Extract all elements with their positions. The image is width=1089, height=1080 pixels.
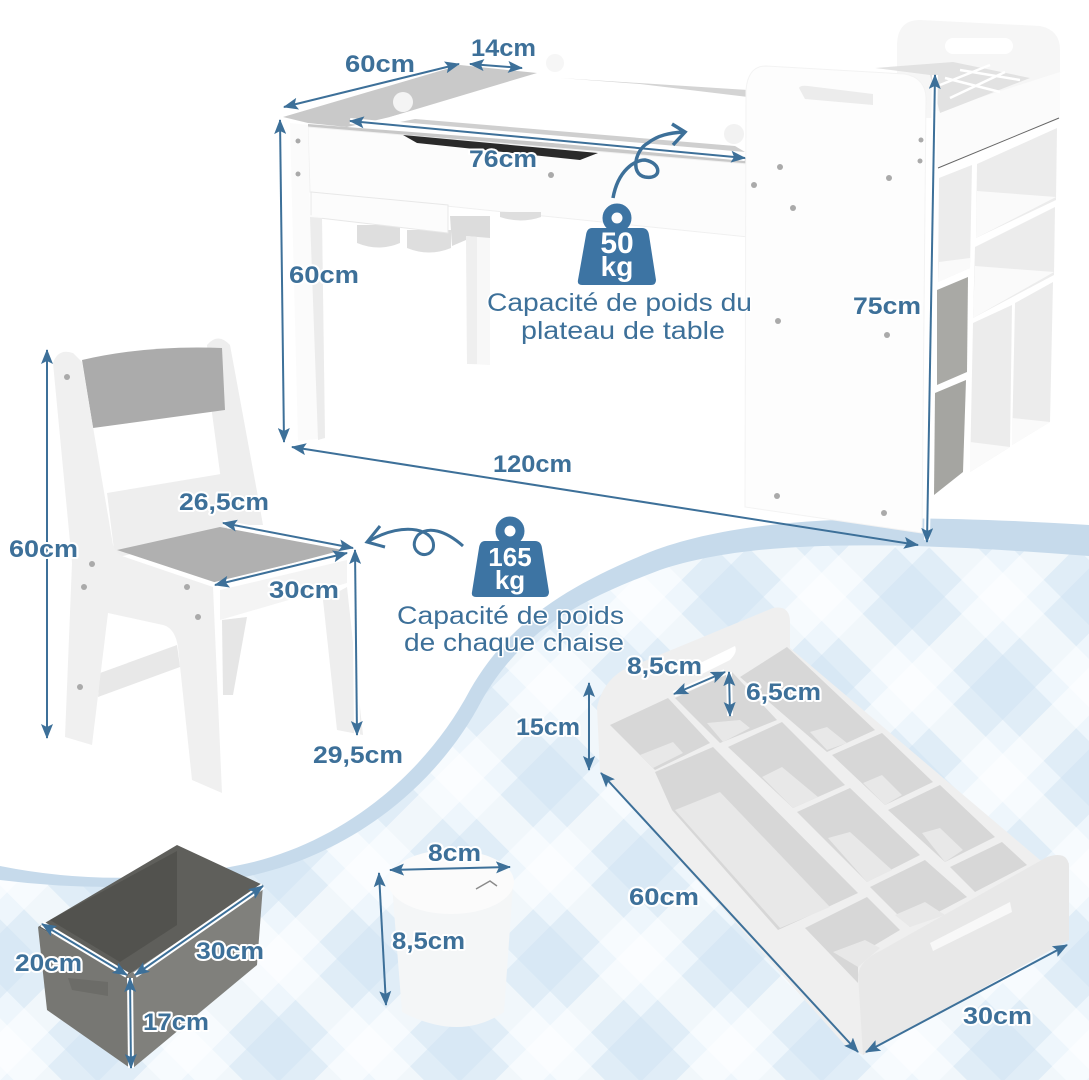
- cabinet side: [925, 118, 1060, 533]
- table dimension arrows: [280, 64, 935, 545]
- cup dimension labels: [392, 840, 481, 955]
- organizer dimension labels: 6,5cm: [746, 679, 821, 706]
- caption: tabletop capacity: [487, 289, 752, 345]
- chair backrest: [82, 348, 225, 428]
- cups under table: [357, 212, 541, 252]
- background: blue curved band: [0, 518, 1089, 1080]
- chair right back post: [207, 338, 263, 525]
- chair dimension labels: 30cm: [269, 577, 339, 604]
- organizer dimension labels: 60cm: [629, 884, 699, 911]
- caption: chair capacity: [397, 602, 624, 657]
- organizer dimension labels: [516, 653, 1032, 1030]
- icon: 165 kg weight: [472, 521, 549, 597]
- chair left side panel: [53, 352, 222, 793]
- curly arrow: tabletop load: [613, 124, 685, 198]
- chair seat: [117, 527, 343, 583]
- chair dimension labels: 60cm: [9, 536, 78, 563]
- table tray far grey top: [283, 65, 537, 127]
- bin dimension labels: 20cm: [15, 950, 82, 977]
- organizer dimension labels: 8,5cm: [627, 653, 702, 680]
- icon: 165 kg weight: kg: [495, 565, 525, 595]
- caption: chair capacity: de chaque chaise: [404, 629, 624, 657]
- table dimension labels: 120cm: [493, 451, 572, 478]
- storage cabinet: [745, 20, 1060, 533]
- background: plaid area: [0, 545, 1089, 1080]
- chair back rail: [107, 473, 227, 558]
- table dimension labels: 14cm: [471, 35, 536, 62]
- fabric storage bin: [38, 845, 263, 1068]
- organizer far handle: [690, 646, 736, 675]
- table drawer: [311, 192, 448, 233]
- table dimension labels: 60cm: [345, 51, 415, 78]
- cup dimension labels: 8,5cm: [392, 928, 465, 955]
- cabinet front panel: [745, 66, 926, 533]
- organizer dimension labels: 30cm: [963, 1003, 1032, 1030]
- curly arrow: chair load: [367, 526, 463, 555]
- table dimension labels: 76cm: [469, 146, 537, 173]
- table dimension labels: 60cm: [289, 262, 359, 289]
- cup body: [392, 885, 513, 1027]
- bin right face: [128, 885, 263, 1068]
- table right leg: [466, 236, 490, 365]
- bin handle: [68, 978, 108, 996]
- chair dimension arrows: [47, 350, 357, 738]
- bin interior: [38, 845, 263, 975]
- cabinet back panel: [897, 20, 1060, 118]
- organizer compartment floors: [675, 792, 830, 928]
- icon: 165 kg weight: 165: [488, 542, 532, 572]
- chair dimension labels: [9, 489, 403, 769]
- table: [283, 54, 757, 441]
- chair stretcher: [98, 645, 180, 697]
- caption: tabletop capacity: plateau de table: [521, 317, 725, 345]
- bin dimension labels: [15, 938, 264, 1036]
- chair: [53, 338, 363, 793]
- table dimension labels: [289, 35, 921, 478]
- white pen cup: [388, 850, 514, 1027]
- organizer near end panel: [858, 855, 1069, 1055]
- chair seat apron: [220, 560, 347, 620]
- table left leg: [290, 123, 325, 441]
- table dimension labels: 75cm: [853, 293, 921, 320]
- chair dimension labels: 26,5cm: [179, 489, 269, 516]
- cup dimension arrows: [379, 867, 510, 1005]
- icon: 50 kg weight: 50: [600, 227, 634, 260]
- chair dimension labels: 29,5cm: [313, 742, 403, 769]
- chair rear right leg: [222, 617, 247, 695]
- shelf compartments: [938, 165, 972, 282]
- caption: tabletop capacity: Capacité de poids du: [487, 289, 752, 317]
- icon: 50 kg weight: kg: [601, 251, 633, 282]
- organizer tray: [597, 608, 1069, 1055]
- caption: chair capacity: Capacité de poids: [397, 602, 624, 630]
- bin left face: [38, 927, 130, 1068]
- cup dimension labels: 8cm: [428, 840, 481, 867]
- table apron: [308, 127, 748, 237]
- organizer outer body: [597, 608, 1069, 1055]
- cup lid: [388, 850, 514, 914]
- icon: 50 kg weight: [578, 208, 656, 285]
- bin dimension labels: 30cm: [196, 938, 264, 965]
- organizer dimension labels: 15cm: [516, 714, 580, 741]
- chair front right leg: [323, 587, 363, 735]
- bin dimension arrows: [42, 886, 263, 1068]
- cabinet fabric drawers: [937, 277, 968, 385]
- organizer compartments: [610, 698, 710, 770]
- table white board: [390, 72, 748, 150]
- organizer dimension arrows: [589, 672, 1067, 1052]
- bin dimension labels: 17cm: [143, 1009, 209, 1036]
